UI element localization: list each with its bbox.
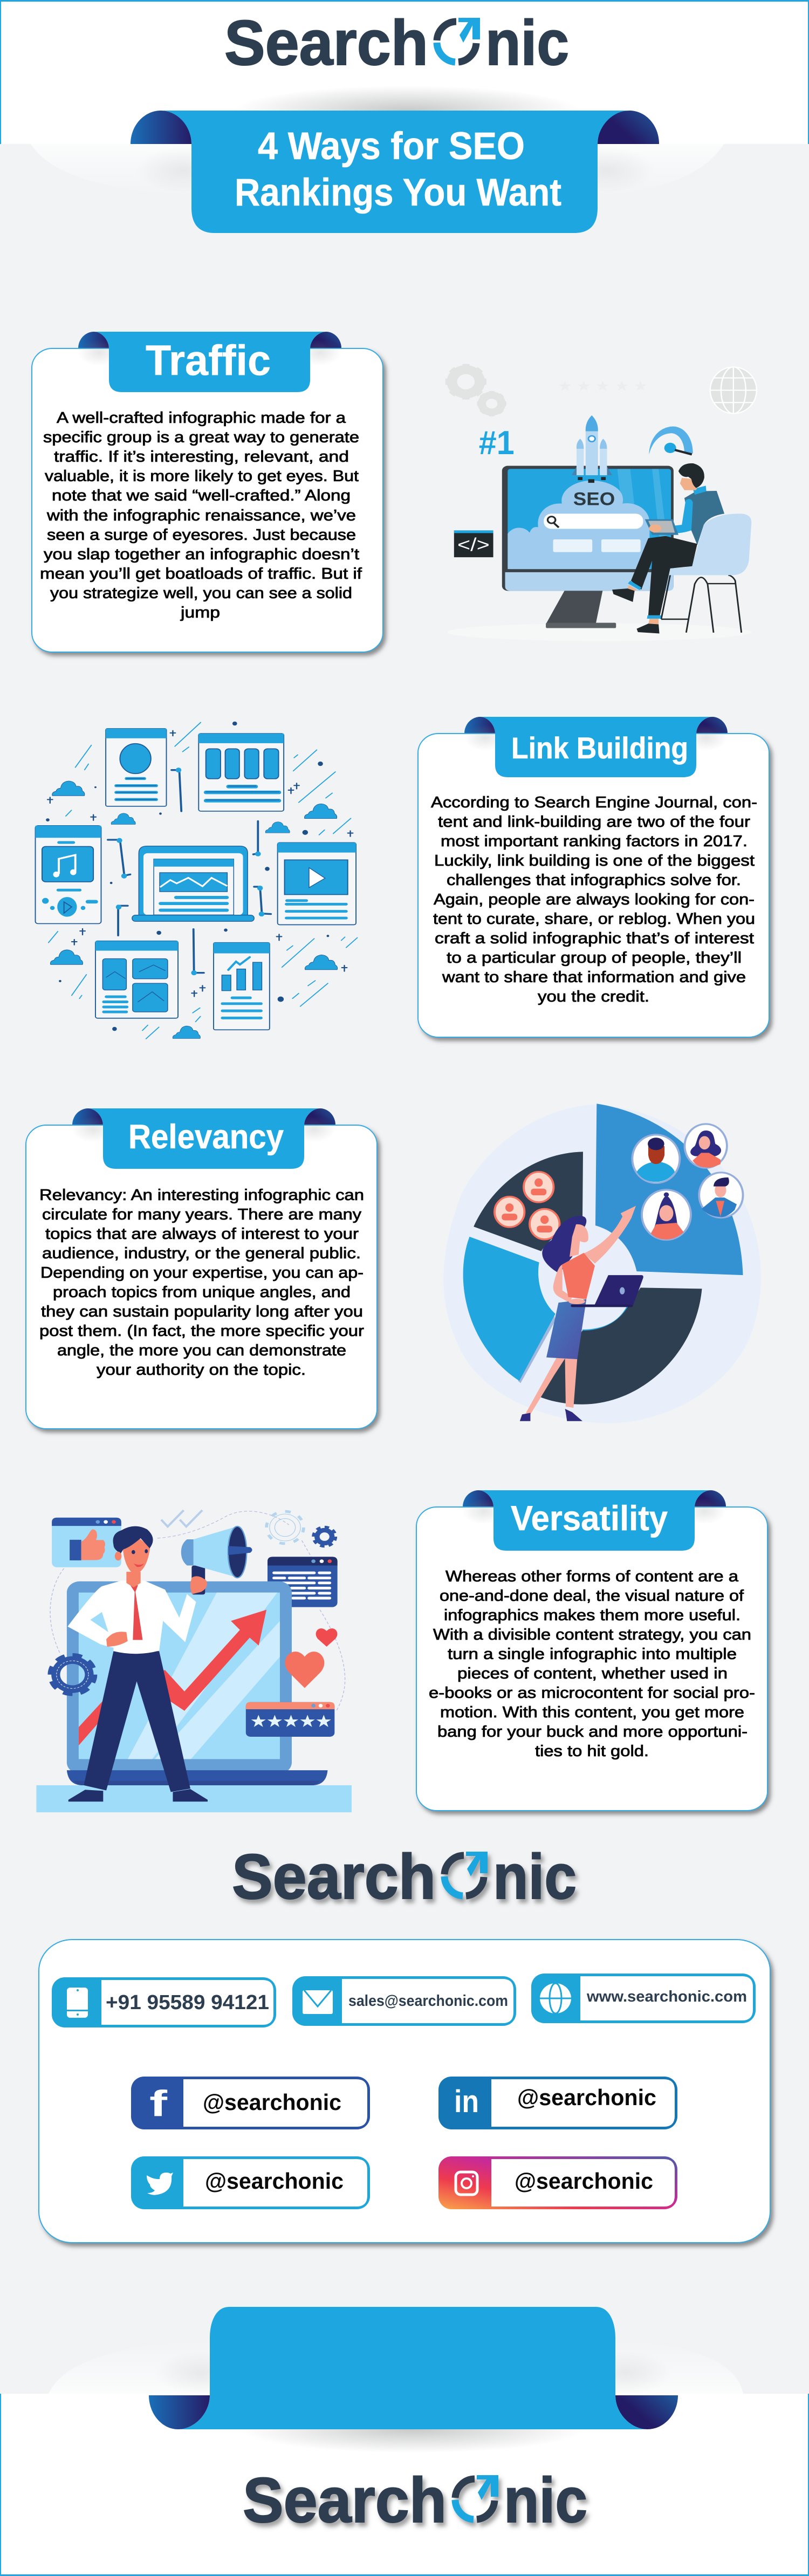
illustration: marketer with megaphone xyxy=(36,1510,352,1812)
logo: top: Search xyxy=(224,8,428,79)
illustration: content windows circle xyxy=(36,722,357,1039)
text block: traffic: note that we said “well-crafted.” Along xyxy=(52,487,351,504)
slashes xyxy=(49,722,357,1039)
window: charts xyxy=(95,941,178,1018)
pie slice: top right xyxy=(595,1104,743,1275)
text block: link building: Again, people are always looking for con- xyxy=(434,891,755,908)
window: music xyxy=(36,826,101,923)
social: twitter: @searchonic xyxy=(205,2168,344,2194)
contact: phone: +91 95589 94121 xyxy=(106,1991,269,2014)
window: bar chart xyxy=(214,943,270,1030)
social: facebook: f xyxy=(149,2083,168,2124)
bottom ribbon xyxy=(149,2307,678,2429)
title ribbon xyxy=(131,111,659,233)
text block: relevancy: topics that are always of interest to your xyxy=(45,1225,359,1243)
social: instagram: @searchonic xyxy=(515,2168,653,2194)
text block: traffic: jump xyxy=(180,604,220,621)
window: clock xyxy=(106,729,167,806)
logo: middle: nic xyxy=(493,1841,577,1913)
heading: link building: Link Building xyxy=(511,731,688,765)
dots and crosses xyxy=(46,722,353,1031)
illustration: SEO monitor and person xyxy=(445,364,757,641)
panel: relevancy xyxy=(26,1108,377,1429)
contact: website xyxy=(531,1974,756,2023)
panel: contact xyxy=(39,1940,770,2243)
text block: relevancy: Relevancy: An interesting infographic can xyxy=(39,1187,364,1204)
text block: relevancy: Depending on your expertise, you can ap- xyxy=(40,1264,364,1282)
text block: relevancy: proach topics from unique angles, and xyxy=(53,1284,351,1301)
text block: traffic: valuable, it is more likely to get eyes. But xyxy=(45,468,359,485)
text block: link building: challenges that infographics solve for. xyxy=(447,872,741,889)
text block: traffic xyxy=(40,409,362,621)
social: linkedin xyxy=(438,2077,677,2129)
text block: traffic: A well-crafted infographic made for a xyxy=(57,409,346,427)
social: twitter xyxy=(131,2156,370,2209)
text block: relevancy: angle, the more you can demonstrate xyxy=(57,1342,346,1359)
gears xyxy=(51,1511,335,1694)
title text: 4 Ways for SEO xyxy=(258,125,525,168)
icon: speed gauge xyxy=(649,427,693,454)
logo: bottom xyxy=(243,2465,587,2536)
icon: globe xyxy=(710,367,757,414)
rocket xyxy=(572,415,612,483)
contact: website: www.searchonic.com xyxy=(586,1988,747,2005)
icon: number one: #1 xyxy=(479,424,515,462)
contact: email xyxy=(292,1976,516,2026)
panel: link building xyxy=(418,717,769,1037)
heading: relevancy: Relevancy xyxy=(128,1118,284,1156)
logo: top: nic xyxy=(485,8,569,79)
social: facebook xyxy=(131,2077,370,2129)
text block: versatility: motion. With this content, you get more xyxy=(440,1704,744,1721)
avatars: blue slice xyxy=(632,1124,743,1240)
text block: link building: craft a solid infographic that’s of interest xyxy=(435,930,754,947)
illustration: audience pie chart xyxy=(443,1104,761,1423)
text block: traffic: traffic. If it’s interesting, relevant, and xyxy=(54,448,349,465)
search bar xyxy=(544,513,643,529)
logo: bottom: Search xyxy=(243,2465,447,2536)
text block: relevancy: they can sustain popularity long after you xyxy=(41,1303,363,1320)
icon: stars xyxy=(559,381,647,390)
text block: versatility: e-books or as microcontent for social pro- xyxy=(429,1684,755,1702)
text block: traffic: specific group is a great way to generate xyxy=(43,429,359,446)
SEO label: SEO xyxy=(573,489,615,509)
icon: code tag xyxy=(454,530,493,557)
panel: traffic xyxy=(32,332,383,652)
dashed path xyxy=(50,1511,345,1710)
text block: traffic: seen a surge of eyesores. Just because xyxy=(47,526,356,544)
text block: versatility: ties to hit gold. xyxy=(535,1743,649,1760)
heading: traffic: Traffic xyxy=(146,336,271,384)
window: laptop xyxy=(132,846,254,921)
text block: versatility: bang for your buck and more opportuni- xyxy=(437,1723,748,1741)
social: linkedin: in xyxy=(454,2084,479,2119)
person at laptop on chair xyxy=(612,463,751,633)
social: linkedin: @searchonic xyxy=(517,2085,656,2110)
growth arrow xyxy=(79,1610,266,1745)
clouds xyxy=(50,781,338,1038)
hearts xyxy=(285,1628,337,1688)
social: instagram xyxy=(438,2156,677,2209)
pie slice: bottom xyxy=(536,1287,702,1405)
text block: versatility: With a divisible content strategy, you can xyxy=(433,1626,751,1643)
logo: middle: Search xyxy=(232,1841,436,1913)
title text: Rankings You Want xyxy=(235,172,561,214)
logo: top xyxy=(224,8,569,79)
text block: link building: you the credit. xyxy=(538,988,649,1005)
window: columns xyxy=(198,734,284,811)
logo: bottom: nic xyxy=(504,2465,587,2536)
man xyxy=(67,1526,208,1801)
text block: versatility: pieces of content, whether used in xyxy=(457,1665,728,1682)
text block: relevancy: your authority on the topic. xyxy=(97,1361,306,1379)
laptop xyxy=(67,1581,327,1785)
text block: versatility: infographics makes them more useful. xyxy=(444,1607,741,1624)
avatars: dark slice xyxy=(495,1172,559,1239)
heading: versatility: Versatility xyxy=(511,1498,668,1538)
icon: gears xyxy=(445,364,507,417)
woman pointing with laptop xyxy=(520,1206,643,1421)
window: ratings xyxy=(246,1702,334,1737)
text block: relevancy: audience, industry, or the general public. xyxy=(42,1245,361,1262)
checkmarks xyxy=(161,1510,202,1526)
text block: link building: want to share that information and give xyxy=(442,969,746,986)
text block: link building: According to Search Engine Journal, con- xyxy=(431,794,757,811)
text block: traffic: you strategize well, you can see a solid xyxy=(50,585,352,602)
contact: phone xyxy=(52,1977,276,2027)
logo: middle xyxy=(232,1841,577,1913)
panel: versatility xyxy=(416,1490,767,1811)
contact: email: sales@searchonic.com xyxy=(348,1992,508,2010)
footer band xyxy=(0,2341,809,2576)
text block: relevancy: circulate for many years. There are many xyxy=(42,1206,362,1223)
header band xyxy=(0,0,809,195)
pie slice: left xyxy=(463,1237,556,1383)
megaphone xyxy=(181,1526,252,1594)
text block: relevancy: post them. (In fact, the more specific your xyxy=(39,1323,364,1340)
window: video xyxy=(278,842,356,924)
text block: link building: most important ranking factors in 2017. xyxy=(441,833,748,850)
text block: versatility: one-and-done deal, the visual nature of xyxy=(440,1587,744,1605)
text block: versatility: turn a single infographic into multiple xyxy=(448,1646,737,1663)
connectors xyxy=(108,768,271,975)
social: facebook: @searchonic xyxy=(203,2089,341,2115)
text block: traffic: with the infographic renaissance, we’ve xyxy=(46,507,356,524)
text block: link building: to a particular group of people, they’ll xyxy=(447,949,742,967)
text block: relevancy xyxy=(39,1187,364,1379)
text block: traffic: you slap together an infographic doesn’t xyxy=(44,546,359,563)
icon: code tag: </> xyxy=(457,535,490,555)
text block: versatility: Whereas other forms of content are a xyxy=(445,1568,739,1585)
text block: link building xyxy=(431,794,757,1005)
text block: traffic: mean you’ll get boatloads of traffic. But if xyxy=(40,565,362,583)
window: text xyxy=(268,1557,338,1607)
pie slice: top left xyxy=(474,1152,583,1251)
monitor xyxy=(502,466,674,628)
title text xyxy=(235,125,561,214)
base platform xyxy=(36,1785,352,1812)
text block: versatility xyxy=(429,1568,755,1760)
window: thumbs up xyxy=(52,1518,121,1567)
text block: link building: tent and link-building are two of the four xyxy=(438,813,750,831)
text block: link building: Luckily, link building is one of the biggest xyxy=(434,852,755,869)
text block: link building: tent to curate, share, or reblog. When you xyxy=(433,910,755,928)
